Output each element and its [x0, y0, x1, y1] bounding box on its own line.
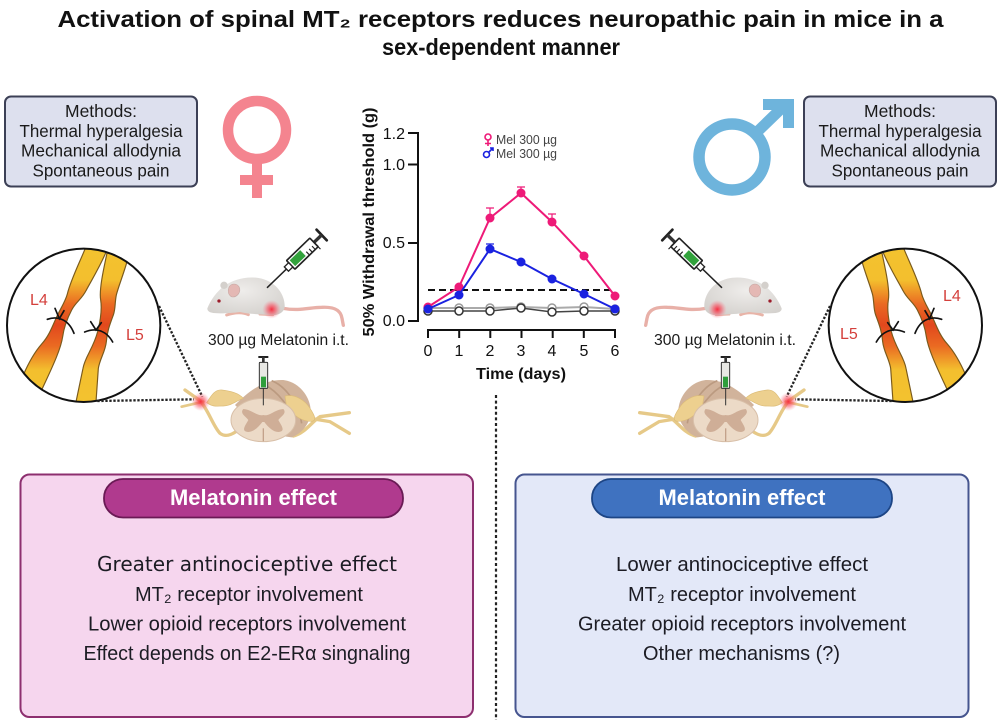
y axis tick labels: 1.2 — [383, 126, 405, 143]
x axis tick labels: 0 — [424, 343, 433, 360]
illustration: female mouse with syringe — [207, 230, 343, 325]
x axis tick labels: 1 — [455, 343, 464, 360]
panel: methods female — [5, 96, 197, 186]
title — [58, 6, 944, 60]
effect list: male: Greater opioid receptors involvement — [578, 612, 906, 636]
effect list: female: Effect depends on E2-ERα singnaling — [84, 642, 410, 665]
x axis title: Time (days) — [476, 366, 566, 383]
y axis title: 50% Withdrawal threshold (g) — [361, 108, 378, 336]
series: male melatonin — [424, 244, 620, 314]
series: controls — [424, 303, 619, 316]
dotted center divider — [495, 395, 497, 720]
heading pill: male: Melatonin effect — [658, 485, 826, 510]
panel: methods male: Methods: — [864, 101, 936, 121]
effect list: male: Other mechanisms (?) — [643, 642, 840, 665]
illustration: female nerve magnifier: L5 — [126, 327, 144, 344]
threshold dashed line — [428, 289, 615, 291]
effect list: female: MT₂ receptor involvement — [135, 583, 363, 606]
x axis tick labels: 3 — [517, 343, 526, 360]
illustration: female nerve magnifier: L4 — [30, 292, 48, 309]
effect list: female: Lower opioid receptors involvement — [88, 612, 406, 636]
panel: methods female: Mechanical allodynia — [21, 140, 181, 160]
illustration: female spinal cord — [182, 357, 349, 442]
panel: methods male: Thermal hyperalgesia — [818, 121, 982, 141]
panel: methods female: Thermal hyperalgesia — [20, 121, 183, 141]
effect list: female — [84, 552, 410, 665]
x axis tick labels: 2 — [486, 343, 495, 360]
effect list: male — [578, 553, 906, 665]
panel: methods female: Spontaneous pain — [32, 160, 170, 180]
y axis tick labels: 0.0 — [383, 313, 405, 330]
chart legend: Mel 300 µg — [496, 133, 557, 147]
chart legend — [484, 133, 557, 161]
icon: male symbol — [699, 99, 794, 190]
panel: male melatonin effect — [516, 474, 968, 717]
x axis tick labels: 4 — [548, 343, 557, 360]
panel: methods male: Spontaneous pain — [832, 160, 968, 180]
illustration: female nerve magnifier — [7, 247, 202, 407]
x axis tick labels: 6 — [611, 343, 620, 360]
panel: female melatonin effect — [20, 474, 473, 717]
chart legend: Mel 300 µg — [496, 147, 557, 161]
x axis tick labels — [424, 343, 620, 360]
line chart — [361, 108, 620, 383]
label: melatonin dose female: 300 µg Melatonin i.t. — [208, 332, 349, 349]
heading pill: female — [104, 479, 403, 518]
y axis tick labels: 0.5 — [383, 235, 405, 252]
chart axes — [408, 133, 615, 338]
illustration: male nerve magnifier: L4 — [943, 288, 961, 305]
y axis tick labels: 1.0 — [383, 157, 405, 174]
illustration: male spinal cord — [640, 357, 807, 442]
illustration: male mouse with syringe — [646, 230, 782, 325]
heading pill: male — [592, 479, 892, 518]
x axis tick labels: 5 — [580, 343, 589, 360]
effect list: male: MT₂ receptor involvement — [628, 583, 856, 606]
heading pill: female: Melatonin effect — [170, 485, 338, 510]
label: melatonin dose male: 300 µg Melatonin i.t. — [654, 332, 796, 349]
illustration: male nerve magnifier: L5 — [840, 326, 858, 343]
panel: methods female: Methods: — [65, 101, 137, 121]
icon: female symbol — [228, 101, 286, 198]
effect list: male: Lower antinociceptive effect — [616, 553, 868, 576]
title: Activation of spinal MT₂ receptors reduces neuropathic pain in mice in a — [58, 6, 944, 32]
panel: methods male: Mechanical allodynia — [820, 140, 980, 160]
panel: methods male — [804, 96, 996, 186]
series: female melatonin — [424, 187, 620, 312]
y axis tick labels — [383, 126, 405, 330]
title: sex-dependent manner — [382, 34, 620, 60]
effect list: female: Greater antinociceptive effect — [97, 552, 397, 576]
illustration: male nerve magnifier — [787, 247, 982, 407]
